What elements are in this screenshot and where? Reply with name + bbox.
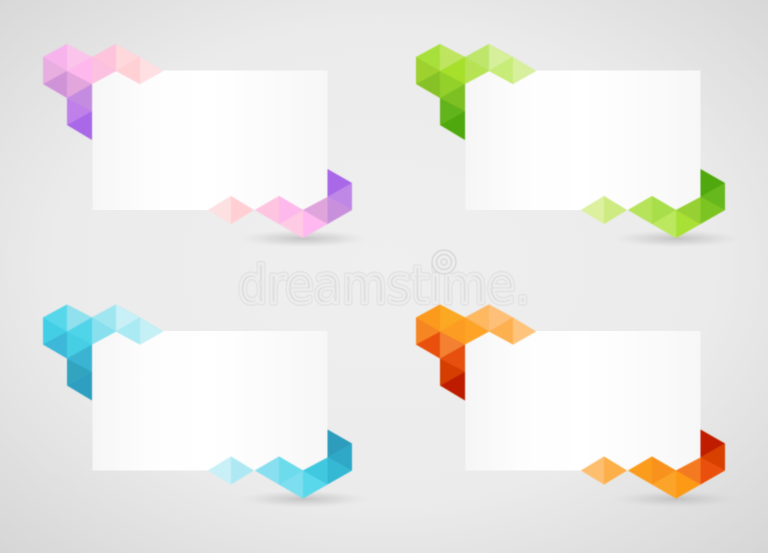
shadow: green [611,230,743,248]
ribbon: blue top left [43,304,163,400]
paper: green [466,70,700,210]
ribbon: green top left [416,44,536,140]
ribbon: pink bottom right [208,169,352,238]
ribbon: pink top left [43,44,163,140]
paper: blue [92,331,328,470]
ribbon: orange bottom right [581,430,725,498]
panel: blue banner [43,304,370,508]
watermark: dreamstime. [238,256,530,316]
shadow: blue [238,490,370,508]
ribbon: green bottom right [581,169,725,238]
paper: pink [92,70,328,210]
ribbon: orange top left [416,304,536,400]
watermark: dreamstime. [238,256,530,316]
shadow: orange [611,490,743,508]
paper: orange [466,331,700,470]
shadow: pink [238,230,370,248]
panel: green banner [416,44,743,248]
panel: pink banner [43,44,370,248]
panel: orange banner [416,304,743,508]
ribbon: blue bottom right [208,430,352,498]
